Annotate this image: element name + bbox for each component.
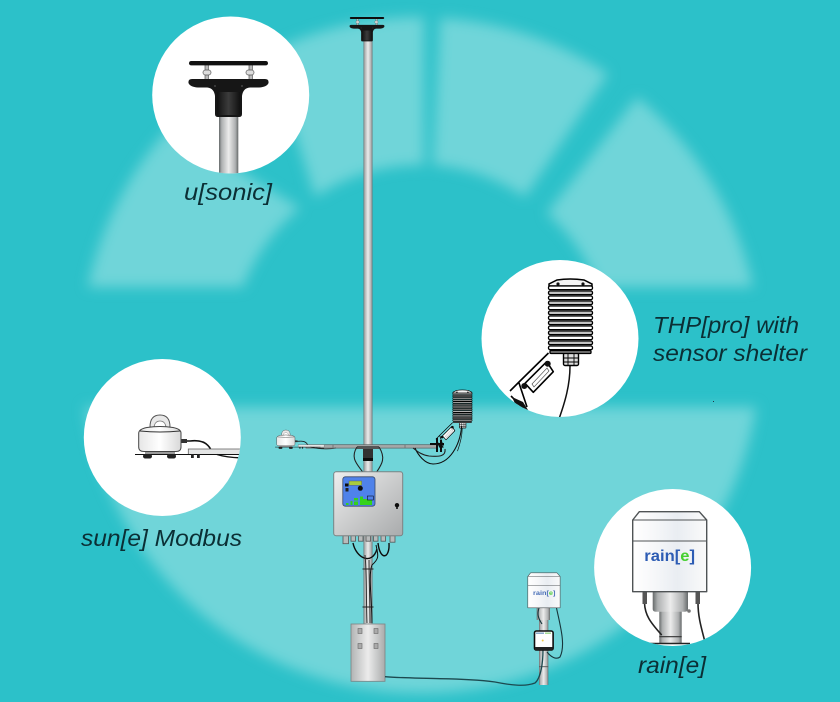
cable glands [343,536,395,544]
icon: u[sonic] on mast [350,17,384,41]
rain[e] logo text: rain[e] [644,548,695,565]
pole [219,116,238,174]
rain sensor pole [539,620,548,685]
junction box [534,631,553,650]
label: THP[pro] with sensor shelter: THP[pro] with [653,312,799,338]
mast clamp and cables [354,446,383,472]
control panel [343,477,375,506]
cables under enclosure [353,543,389,623]
icon: sun[e] on arm [275,430,324,449]
panel: u[sonic] circle [152,16,309,174]
crossarm [306,445,437,449]
background wheel segments [85,17,756,693]
icon: ultrasonic sensor [188,61,269,117]
speck [713,401,714,402]
concrete base [351,624,385,681]
label: sun[e] Modbus: sun[e] Modbus [81,525,243,551]
panel: THP[pro] circle [482,260,638,418]
icon: sensor shelter [510,279,592,418]
label: THP[pro] with sensor shelter: sensor shelter [653,340,808,366]
panel: rain[e] circle [594,489,751,646]
label: rain[e]: rain[e] [638,652,707,678]
icon: rain gauge [633,512,707,644]
icon: pyranometer [135,415,248,458]
panel: sun[e] circle [84,359,248,516]
keyhole [395,503,399,509]
weather station assembly [275,17,563,685]
sensor cables [385,608,563,685]
label: u[sonic]: u[sonic] [184,179,273,205]
icon: THP[pro] on arm [413,390,472,464]
icon: rain[e] on pole: rain[ e] [533,590,556,597]
enclosure box [334,472,403,536]
mast pole [364,40,372,624]
icon: rain[e] on pole [528,573,560,608]
